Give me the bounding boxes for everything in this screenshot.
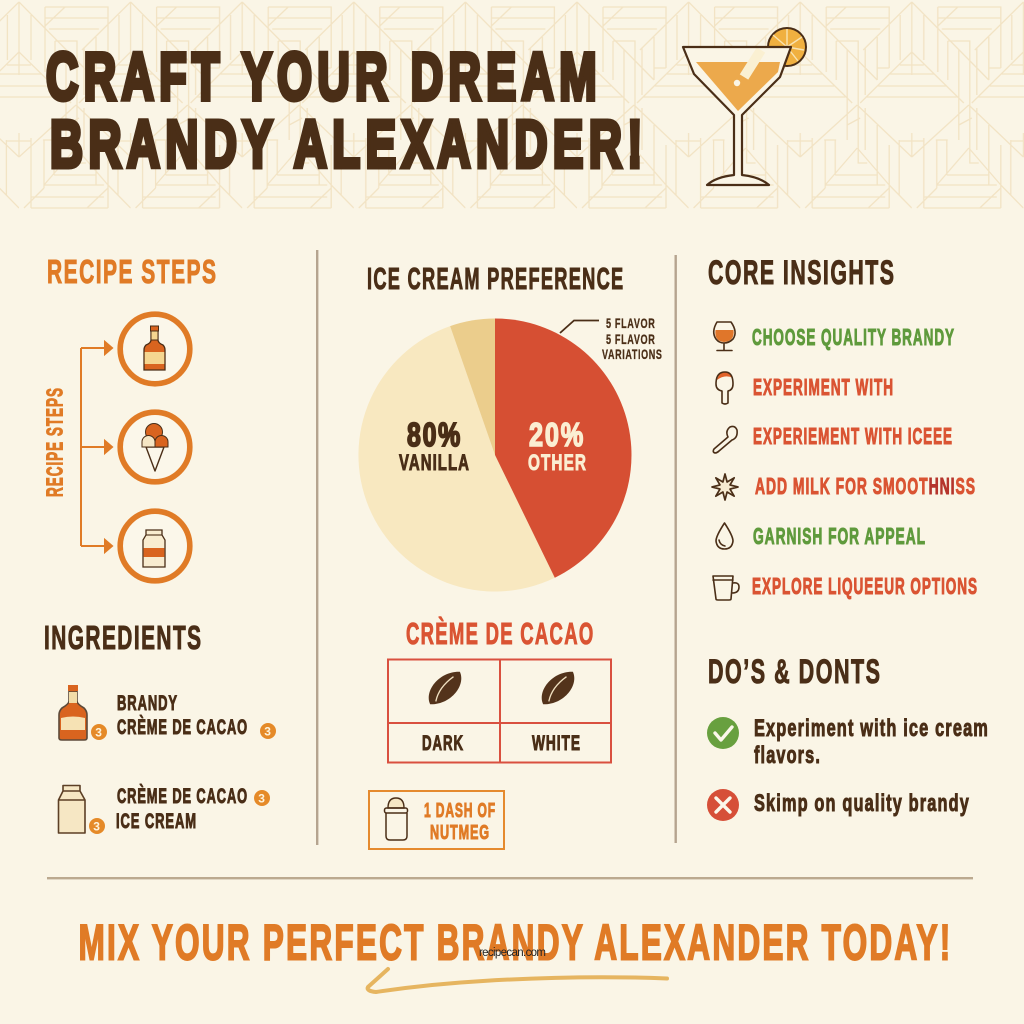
icon: brandy bottle (59, 685, 87, 740)
title (46, 40, 648, 182)
insight: add milk for smoothness (712, 473, 976, 500)
badge: 3: 3 (258, 792, 266, 806)
do: experiment with ice cream flavors (707, 715, 989, 769)
column divider left (316, 250, 318, 845)
icon: ice cream spoon (716, 372, 733, 404)
insight: experiment with (716, 372, 894, 404)
callout: flavor variations: VARIATIONS (602, 346, 662, 362)
slice: other (495, 318, 631, 578)
label: 80% vanilla: VANILLA (399, 450, 470, 475)
label: 80% vanilla: 80% (407, 416, 462, 453)
title: CRAFT YOUR DREAM (46, 40, 602, 114)
badge: 3: 3 (93, 820, 101, 834)
footer divider (47, 877, 973, 879)
heading: creme de cacao: CRÈME DE CACAO (406, 616, 594, 651)
text: 1 dash of nutmeg: 1 DASH OF (424, 800, 496, 822)
callout: flavor variations: 5 FLAVOR (606, 315, 656, 331)
badge: 3 (260, 723, 276, 739)
icon: cacao bean (422, 665, 468, 711)
column divider right (674, 255, 677, 843)
swoosh underline (368, 969, 667, 992)
step 1: brandy bottle (120, 314, 190, 384)
callout: nutmeg (369, 791, 504, 849)
text: creme de cacao, ice cream (116, 785, 248, 833)
text: brandy, creme de cacao: CRÈME DE CACAO (117, 716, 248, 739)
watermark: recipecan.com (479, 947, 546, 959)
slice: vanilla (358, 326, 555, 592)
heading: ingredients: INGREDIENTS (44, 619, 202, 656)
label: white: WHITE (532, 732, 581, 755)
panel: left column (42, 253, 276, 834)
label: 20% other (528, 416, 587, 475)
insight: garnish for appeal (716, 523, 926, 549)
icon: star anise (712, 474, 738, 500)
insight: experiement with iceee (713, 423, 953, 453)
text: 1 dash of nutmeg (424, 800, 496, 844)
heading: dos and donts: DO’S & DONTS (708, 653, 882, 691)
icon: snifter (714, 322, 735, 350)
pie chart (358, 318, 631, 592)
text: creme de cacao, ice cream: CRÈME DE CACAO (117, 785, 248, 808)
text: creme de cacao, ice cream: ICE CREAM (116, 810, 197, 833)
icon: spoon (713, 426, 737, 453)
text: brandy, creme de cacao: BRANDY (117, 692, 178, 715)
header art deco pattern (0, 0, 1024, 209)
text: brandy, creme de cacao (117, 692, 248, 739)
icon: shaker (384, 798, 408, 840)
heading: ice cream preference: ICE CREAM PREFERENCE (367, 261, 624, 296)
icon: mug (713, 576, 739, 600)
badge: 3: 3 (95, 726, 103, 740)
icon: drop (716, 523, 733, 549)
rotated label: recipe steps: RECIPE STEPS (42, 387, 68, 497)
insight: experiment with: EXPERIMENT WITH (753, 374, 894, 400)
label: 80% vanilla (399, 416, 470, 475)
icon: milk carton (58, 786, 85, 833)
table: dark and white cacao (388, 660, 611, 762)
dont: skimp on quality brandy (707, 789, 970, 821)
badge: 3 (89, 818, 105, 834)
title: BRANDY ALEXANDER! (50, 107, 648, 182)
callout: flavor variations: 5 FLAVOR (606, 331, 656, 347)
label: dark: DARK (422, 732, 464, 755)
insight: choose quality brandy (714, 322, 955, 350)
badge: 3 (254, 790, 270, 806)
label: 20% other: OTHER (528, 450, 587, 475)
icon: cacao bean (535, 665, 581, 711)
badge: 3 (91, 724, 107, 740)
step 2: ice cream cone (120, 412, 190, 482)
panel: right column (707, 254, 989, 821)
panel: center column (358, 261, 662, 849)
icon: martini glass (683, 28, 806, 185)
heading: recipe steps: RECIPE STEPS (47, 253, 218, 290)
step 3: milk jar (120, 511, 190, 581)
callout: flavor variations (560, 315, 662, 362)
slice: flavor variations (450, 318, 495, 455)
label: 20% other: 20% (529, 416, 585, 453)
do: experiment with ice cream flavors: flavors. (754, 742, 821, 769)
text: 1 dash of nutmeg: NUTMEG (430, 822, 490, 844)
heading: core insights: CORE INSIGHTS (708, 254, 896, 292)
flow connector arrows (81, 342, 112, 552)
badge: 3: 3 (264, 724, 272, 738)
